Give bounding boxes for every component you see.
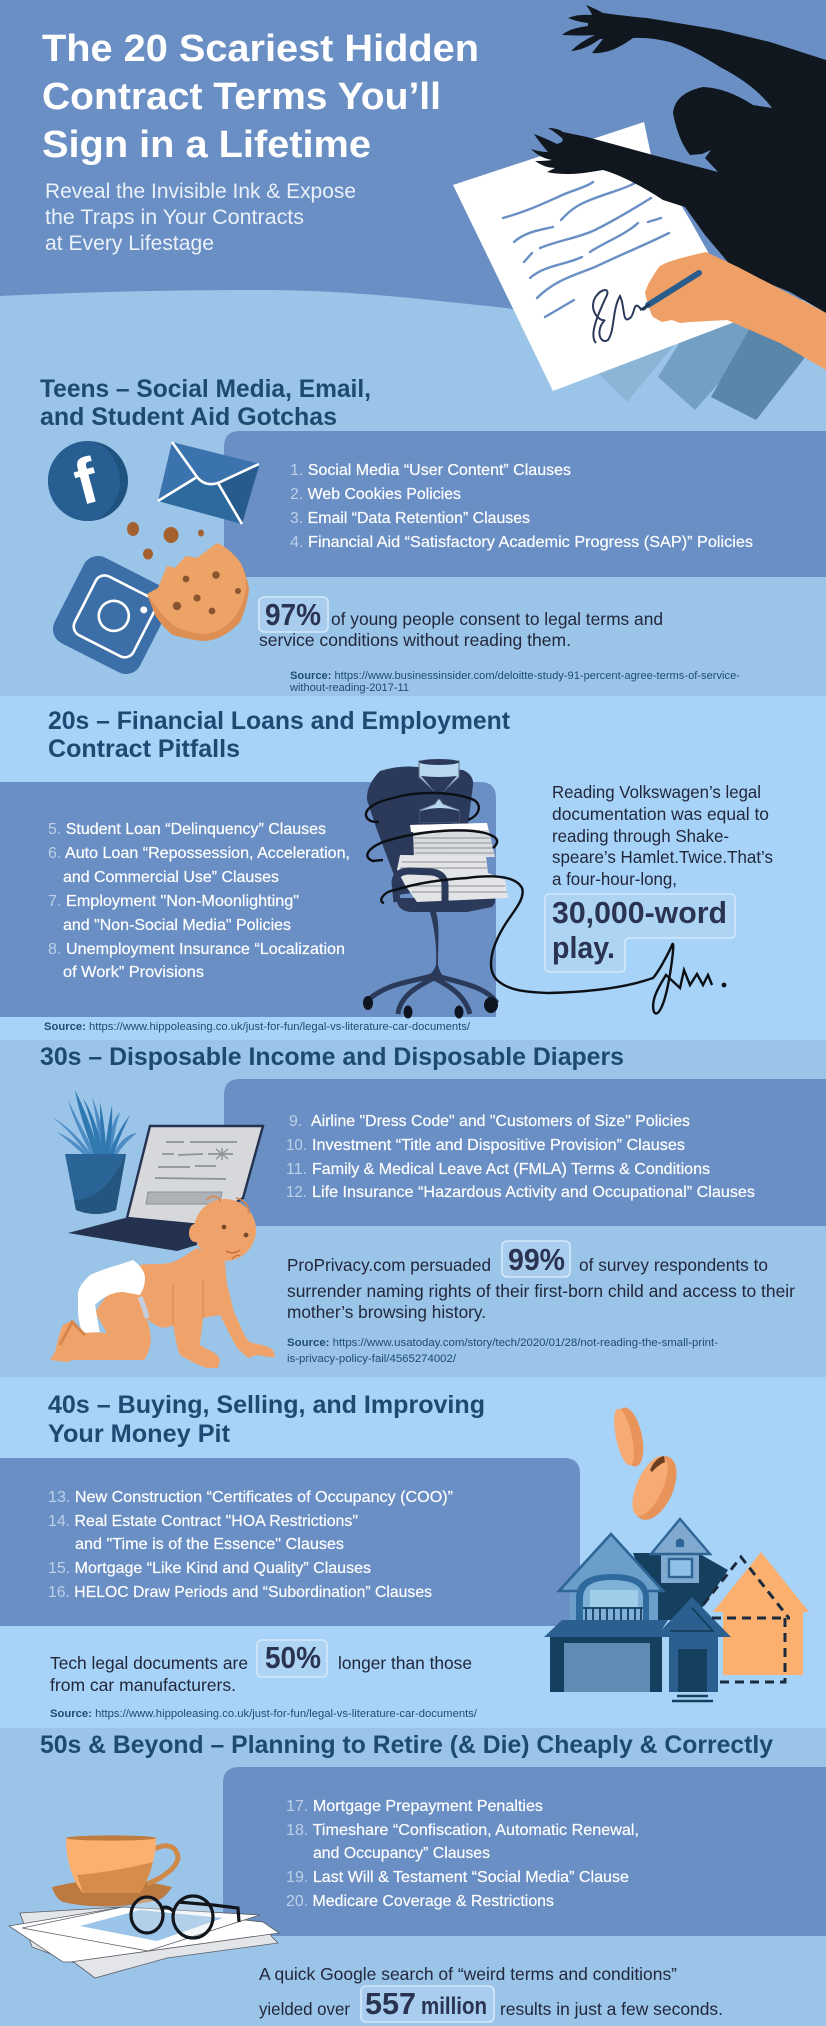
title: Sign in a Lifetime <box>42 124 371 166</box>
contract text lines <box>503 182 669 317</box>
source: Source: https://www.businessinsider.com/deloitte-study-91-percent-agree-terms-of-service- <box>290 670 740 682</box>
stat: 97% <box>259 597 663 650</box>
paper stack <box>397 823 508 902</box>
clause list: of Work” Provisions <box>63 964 204 981</box>
extra contract sheets <box>595 310 820 420</box>
heading: and Student Aid Gotchas <box>40 403 337 431</box>
clause list <box>286 1798 639 1910</box>
dormer <box>651 1519 710 1583</box>
clause list: 2. Web Cookies Policies <box>290 486 461 503</box>
garage <box>550 1637 662 1692</box>
illustration: office chair with hourglass, paper stack and cord <box>363 759 726 1018</box>
clause list: and "Time is of the Essence" Clauses <box>75 1536 344 1553</box>
heading: Teens – Social Media, Email, <box>40 375 371 403</box>
icon: cookie crumbs <box>127 522 204 560</box>
title: Contract Terms You’ll <box>42 76 441 118</box>
clause list: 10. <box>286 1137 307 1154</box>
heading: 20s – Financial Loans and Employment <box>48 707 511 735</box>
clause list: 9. <box>289 1113 302 1130</box>
clause list: 16. HELOC Draw Periods and “Subordination” Clauses <box>48 1584 432 1601</box>
illustration: papers <box>9 1907 279 1978</box>
illustration: crawling baby <box>50 1196 275 1368</box>
illustration: shadow monster over a contract being signed <box>453 5 826 420</box>
icon: facebook <box>48 441 128 521</box>
stat: 50%: 50% <box>265 1640 321 1675</box>
panel: clause list <box>0 782 496 1017</box>
clause list: 18. Timeshare “Confiscation, Automatic Renewal, <box>286 1822 639 1839</box>
section background: twenties <box>0 696 826 1040</box>
clause list: and "Non-Social Media" Policies <box>63 917 291 934</box>
callout: Volkswagen fact: a four-hour-long, <box>552 869 677 889</box>
chair seat <box>397 898 495 912</box>
illustration: plant <box>52 1090 137 1214</box>
stat: 97%: of young people consent to legal terms and <box>331 609 663 629</box>
stat: 557 million: 557 <box>365 1986 416 2021</box>
clause list: Life Insurance “Hazardous Activity and Occupational” Clauses <box>312 1184 755 1201</box>
baby body <box>50 1248 275 1368</box>
stat: 50%: longer than those <box>338 1653 472 1673</box>
roof band <box>544 1620 668 1637</box>
clause list: 19. Last Will & Testament “Social Media” Clause <box>286 1869 629 1886</box>
clause list: 14. Real Estate Contract "HOA Restrictions" <box>48 1513 358 1530</box>
heading <box>40 375 371 431</box>
source: Source: https://www.hippoleasing.co.uk/just-for-fun/legal-vs-literature-car-documents/ <box>44 1021 471 1033</box>
clause list: 15. Mortgage “Like Kind and Quality” Clauses <box>48 1560 371 1577</box>
stat: 557 million <box>259 1964 723 2022</box>
source: Source: https://www.usatoday.com/story/tech/2020/01/28/not-reading-the-small-print- <box>287 1337 718 1349</box>
source: is-privacy-policy-fail/4565274002/ <box>287 1353 457 1365</box>
contract paper <box>453 122 745 391</box>
stat: 99%: mother’s browsing history. <box>287 1302 486 1322</box>
section: forties <box>0 1391 809 1720</box>
stat: 99%: ProPrivacy.com persuaded <box>287 1255 491 1275</box>
stat: 50%: from car manufacturers. <box>50 1675 236 1695</box>
panel: clause list <box>0 1458 580 1626</box>
clause list <box>48 821 350 981</box>
subtitle: Reveal the Invisible Ink & Expose <box>45 180 356 203</box>
callout: Volkswagen fact: documentation was equal to <box>552 804 769 824</box>
source: without-reading-2017-11 <box>289 682 409 694</box>
source: Source: https://www.hippoleasing.co.uk/just-for-fun/legal-vs-literature-car-documents/ <box>50 1708 478 1720</box>
stat: 97%: service conditions without reading them. <box>259 630 571 650</box>
callout: Volkswagen fact: 30,000-word <box>552 895 727 930</box>
stat: 50% <box>50 1640 472 1695</box>
clause list: 11. <box>286 1161 307 1178</box>
section background: forties <box>0 1377 826 1728</box>
subtitle: the Traps in Your Contracts <box>45 206 304 229</box>
diaper <box>78 1260 145 1333</box>
monster silhouette <box>531 5 826 313</box>
callout: Volkswagen fact: reading through Shake- <box>552 826 729 846</box>
stat: 557 million: yielded over <box>259 1999 350 2019</box>
clause list: 6. Auto Loan “Repossession, Acceleration, <box>48 845 350 862</box>
illustration: coffee cup and saucer <box>52 1835 178 1907</box>
clause list: Investment “Title and Dispositive Provision” Clauses <box>312 1137 685 1154</box>
panel: clause list <box>224 431 826 577</box>
dashed outline <box>703 1557 790 1682</box>
clause list: 3. Email “Data Retention” Clauses <box>290 510 530 527</box>
orange planned extension <box>713 1552 809 1675</box>
clause list: and Commercial Use” Clauses <box>63 869 279 886</box>
heading: 50s & Beyond – Planning to Retire (& Die) Cheaply & Correctly <box>40 1731 773 1759</box>
icon: instagram <box>47 550 177 680</box>
callout: Volkswagen fact: speare’s Hamlet.Twice.That’s <box>552 847 773 867</box>
clause list: Airline "Dress Code" and "Customers of Size" Policies <box>311 1113 690 1130</box>
heading: 40s – Buying, Selling, and Improving <box>48 1391 485 1419</box>
stat: 97%: 97% <box>265 597 321 632</box>
callout: Volkswagen fact: play. <box>552 930 615 965</box>
callout: Volkswagen fact <box>545 782 773 972</box>
clause list: 20. Medicare Coverage & Restrictions <box>286 1893 554 1910</box>
section: thirties <box>40 1043 826 1368</box>
hourglass <box>419 759 459 822</box>
stat: 557 million: results in just a few seconds. <box>500 1999 723 2019</box>
source <box>289 670 740 694</box>
chair stem and base <box>365 912 497 1014</box>
front porch <box>655 1597 731 1701</box>
stat: 99% <box>287 1241 795 1322</box>
clause list: 12. <box>286 1184 307 1201</box>
icon: falling coins <box>610 1405 685 1526</box>
heading <box>48 707 511 763</box>
stat: 99%: of survey respondents to <box>579 1255 768 1275</box>
subtitle <box>45 180 356 255</box>
header background <box>0 0 826 330</box>
clause list: Family & Medical Leave Act (FMLA) Terms & Conditions <box>312 1161 710 1178</box>
stat: 99%: surrender naming rights of their first-born child and access to their <box>287 1281 795 1301</box>
hand holding pen <box>640 252 826 370</box>
clause list <box>286 1113 755 1201</box>
clause list: 8. Unemployment Insurance “Localization <box>48 941 345 958</box>
clause list <box>290 462 753 551</box>
stat: 50%: Tech legal documents are <box>50 1653 248 1673</box>
panel: clause list <box>223 1767 826 1936</box>
clause list: 7. Employment "Non-Moonlighting" <box>48 893 299 910</box>
main gable <box>559 1534 663 1624</box>
clause list: 5. Student Loan “Delinquency” Clauses <box>48 821 326 838</box>
section: fifties and beyond <box>9 1731 826 2022</box>
signature dot <box>722 983 726 987</box>
cord wrapping chair, ending in signature <box>366 793 712 1013</box>
baby details <box>60 1196 248 1345</box>
illustration: glasses <box>131 1896 239 1938</box>
clause list: 4. Financial Aid “Satisfactory Academic Progress (SAP)” Policies <box>290 534 753 551</box>
dark rear block <box>633 1553 728 1620</box>
heading: Contract Pitfalls <box>48 735 240 763</box>
clause list: and Occupancy” Clauses <box>313 1845 490 1862</box>
callout: Volkswagen fact: Reading Volkswagen’s legal <box>552 782 761 802</box>
panel: clause list <box>224 1079 826 1226</box>
clause list: 17. Mortgage Prepayment Penalties <box>286 1798 543 1815</box>
chair back <box>367 766 473 895</box>
icon: bitten cookie <box>147 543 249 641</box>
title: The 20 Scariest Hidden <box>42 28 479 70</box>
chair armrest <box>395 871 445 902</box>
clause list: 13. New Construction “Certificates of Occupancy (COO)” <box>48 1489 453 1506</box>
heading: Your Money Pit <box>48 1420 231 1448</box>
source <box>287 1337 718 1365</box>
title <box>42 28 479 166</box>
clause list <box>48 1489 453 1601</box>
stat: 99%: 99% <box>508 1242 565 1277</box>
illustration: laptop <box>68 1126 263 1251</box>
icon: envelope <box>158 442 260 524</box>
section: teens <box>40 375 826 694</box>
stat: 557 million: A quick Google search of “weird terms and conditions” <box>259 1964 677 1984</box>
stat: 557 million: million <box>421 1993 487 2020</box>
baby head <box>194 1199 256 1261</box>
illustration: house with dashed extension <box>544 1519 809 1701</box>
chair casters <box>363 996 498 1018</box>
section: twenties <box>0 707 773 1033</box>
heading: 30s – Disposable Income and Disposable Diapers <box>40 1043 624 1071</box>
heading <box>48 1391 485 1448</box>
clause list: 1. Social Media “User Content” Clauses <box>290 462 571 479</box>
signature on contract <box>593 290 650 343</box>
subtitle: at Every Lifestage <box>45 232 214 255</box>
icon: facebook: f <box>66 444 106 519</box>
